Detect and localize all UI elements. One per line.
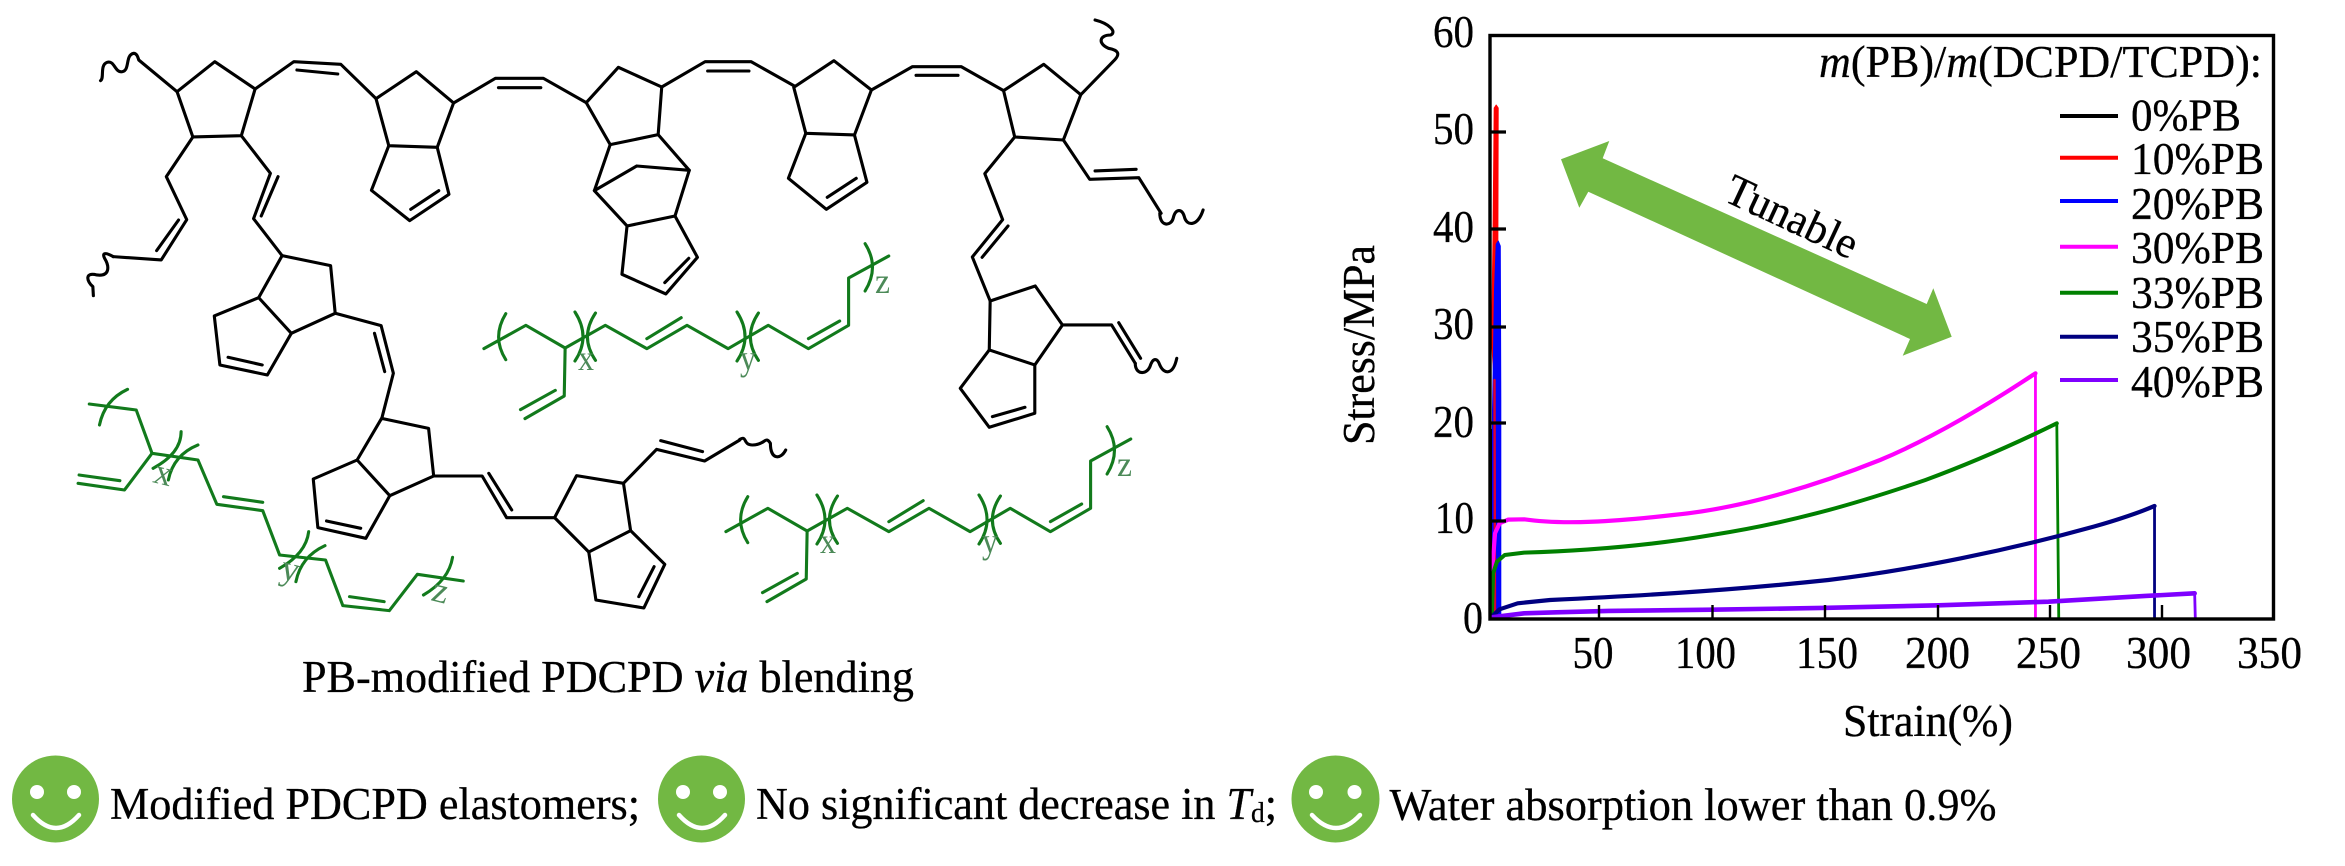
curve: 20%PB [1492,241,1501,619]
x axis title: Strain(%) [1843,696,2013,746]
y axis tick labels: 10 [1435,493,1474,543]
structure: green polybutadiene chain, lower left (tilted): x [150,451,177,494]
y axis tick labels [1433,7,1483,643]
panel: benefits row [12,756,1996,842]
curve: 40%PB [1492,593,2195,618]
structure: black PDCPD backbone, right half [788,20,1203,427]
icon: smiley 2 [658,756,745,842]
structure: black PDCPD lower branch [313,418,786,608]
x axis tick labels: 100 [1675,628,1736,678]
curve: 0%PB [1491,430,1492,619]
curve: 10%PB [1492,105,1498,380]
curve: 35%PB [1492,506,2155,618]
icon: smiley 3 [1292,756,1380,842]
icon: smiley 1 [12,756,99,842]
legend labels: 0%PB [2131,91,2241,141]
y axis tick labels: 0 [1463,593,1483,643]
x axis tick labels: 150 [1796,628,1858,678]
legend labels: 35%PB [2131,312,2264,362]
y axis tick labels: 40 [1433,202,1474,252]
text: No significant decrease in Td: No significant decrease in T [756,779,1251,829]
text: Modified PDCPD elastomers: Modified PDCPD elastomers; [110,779,640,829]
curve: 10%PB lower part [1493,380,1496,619]
arrow: green double-headed tunable arrow [1561,141,1952,356]
x axis tick labels: 50 [1572,628,1614,678]
x axis tick labels: 250 [2016,628,2081,678]
structure: green polybutadiene chain, upper centre: y [740,338,756,378]
legend labels [2131,91,2264,407]
text: Water absorption lower than 0.9%: Water absorption lower than 0.9% [1390,780,1996,830]
legend labels: 33%PB [2131,268,2264,318]
x axis tick labels: 350 [2237,628,2302,678]
x axis tick labels: 200 [1905,628,1970,678]
legend [1819,37,2264,407]
y axis tick labels: 60 [1433,7,1474,57]
y axis title: Stress/MPa [1334,245,1384,445]
panel: PB-modified PDCPD chemical structure [78,20,1203,702]
y axis tick labels: 50 [1433,104,1474,154]
structure: green polybutadiene chain, upper centre: z [875,261,890,301]
structure: green polybutadiene chain, lower right: z [1117,444,1132,484]
caption: PB-modified PDCPD via blending: PB-modified PDCPD via blending [302,652,914,702]
panel: stress-strain chart [1334,7,2302,746]
chart curves: stress-strain data [1491,105,2195,619]
x axis tick labels [1572,628,2302,678]
structure: green polybutadiene chain, lower right: x [820,521,836,561]
legend labels: 40%PB [2131,357,2264,407]
arrow label: Tunable: Tunable [1718,165,1866,269]
y axis tick labels: 20 [1433,397,1474,447]
structure: green polybutadiene chain, lower right [726,427,1132,602]
structure: green polybutadiene chain, upper centre [484,244,890,419]
structure: green polybutadiene chain, lower right: y [982,521,998,561]
legend swatches [2060,116,2118,380]
structure: green polybutadiene chain, lower left (tilted): y [277,547,304,590]
legend title: m(PB)/m(DCPD/TCPD): [1819,37,2262,87]
text: No significant decrease in Td: ; [1265,779,1277,829]
legend labels: 10%PB [2131,134,2264,184]
structure: black PDCPD backbone, left half [88,53,794,419]
curve: 33%PB [1492,423,2059,618]
structure: green polybutadiene chain, lower left (tilted): z [428,569,453,612]
curve: 30%PB [1492,373,2035,618]
structure: green polybutadiene chain, lower left (tilted) [78,389,463,612]
x axis tick labels: 300 [2126,628,2191,678]
chart frame and tick marks [1490,36,2274,619]
y axis tick labels: 30 [1433,299,1474,349]
legend labels: 30%PB [2131,223,2264,273]
legend labels: 20%PB [2131,179,2264,229]
structure: green polybutadiene chain, upper centre: x [578,338,594,378]
text: No significant decrease in Td: d [1251,798,1265,829]
